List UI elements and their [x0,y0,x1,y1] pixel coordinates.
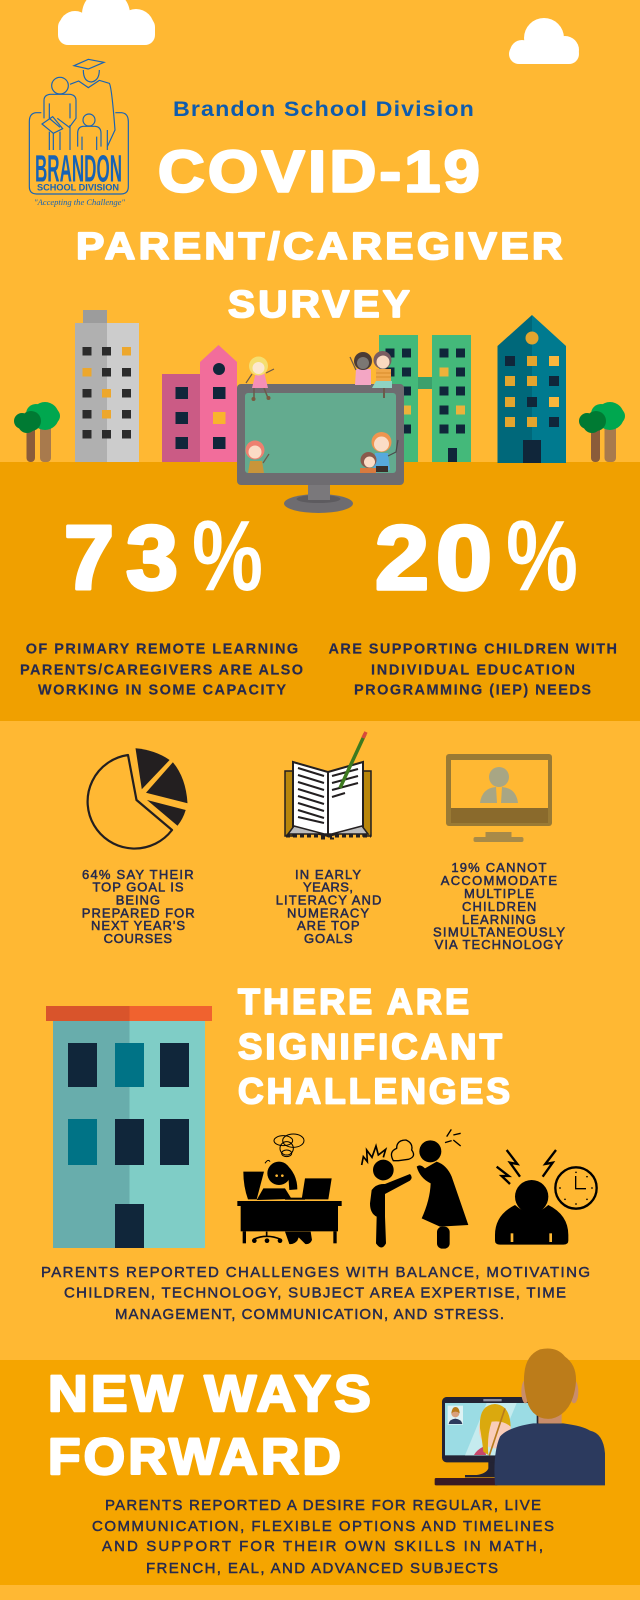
icon: stressed person with clock [495,1150,597,1245]
text: desires reported [92,1497,554,1577]
icon: cloud right [509,18,579,64]
illustration: school building [46,1006,212,1248]
band: statistics background [0,462,640,721]
icon: pie chart [88,748,188,849]
title: Parent/Caregiver: PARENT/CAREGIVER [76,226,566,268]
text: technology limits: LEARNING [462,912,536,927]
text: top goal: PREPARED FOR [82,905,195,920]
text: technology limits: 19% CANNOT [451,860,546,875]
text: top goal: COURSES [104,931,172,946]
text: IEP needs: INDIVIDUAL EDUCATION [371,662,575,678]
text: working parents: PARENTS/CAREGIVERS ARE ALSO [20,662,303,678]
text: challenges reported: MANAGEMENT, COMMUNICATION, AND STRESS. [115,1306,504,1323]
text: early years [276,867,381,946]
icon: cloud left [58,0,155,45]
illustration: grey tower [75,310,139,462]
band: new ways forward background [0,1360,640,1585]
text: challenges reported: PARENTS REPORTED CHALLENGES WITH BALANCE, MOTIVATING [41,1264,590,1281]
text: working parents: WORKING IN SOME CAPACITY [38,682,286,698]
text: top goal: BEING [116,893,160,908]
text: BRANDON [35,148,122,190]
title: Survey: SURVEY [228,284,413,326]
text: top goal: NEXT YEAR'S [91,918,185,933]
text: top goal: 64% SAY THEIR [82,867,194,882]
stat: 73%: 3 [126,508,178,609]
stat: 73%: 7 [64,508,114,609]
illustration: person on video call [435,1349,605,1485]
illustration: teal building [498,315,566,463]
text: early years: LITERACY AND [276,893,381,908]
text: desires reported: FRENCH, EAL, AND ADVANCED SUBJECTS [146,1560,498,1577]
heading: There are significant challenges: CHALLENGES [238,1070,513,1112]
icon: open book and pencil [285,732,371,838]
text: working parents [20,642,303,698]
illustration: green buildings [379,335,471,462]
illustration: left trees [14,402,60,462]
icon: parent and child arguing [362,1129,468,1249]
logo: Brandon School Division: SCHOOL DIVISION [37,182,119,194]
text: desires reported: PARENTS REPORTED A DESIRE FOR REGULAR, LIVE [105,1497,541,1514]
text: early years: GOALS [304,931,353,946]
text: early years: IN EARLY [295,867,361,882]
logo: Brandon School Division: "Accepting the Challenge" [34,198,126,207]
icon: stressed parent at desk [237,1134,342,1244]
text: early years: NUMERACY [287,905,369,920]
text: IEP needs: ARE SUPPORTING CHILDREN WITH [328,642,617,658]
stat: 20%: 0 [436,508,492,609]
illustration: red-haired girl in screen [246,440,269,473]
illustration: two children on monitor [350,351,392,398]
text: technology limits: MULTIPLE [464,886,534,901]
illustration: computer monitor [237,384,404,513]
text: technology limits [433,860,565,952]
text: IEP needs [328,642,617,698]
text: technology limits: SIMULTANEOUSLY [433,925,565,940]
text: challenges reported: CHILDREN, TECHNOLOGY, SUBJECT AREA EXPERTISE, TIME [64,1284,566,1302]
text: technology limits: VIA TECHNOLOGY [435,937,563,952]
text: technology limits: ACCOMMODATE [441,873,557,888]
logo: Brandon School Division [29,59,128,207]
subtitle: Brandon School Division: Brandon School Division [173,98,475,121]
stat: 20%: 2 [375,508,429,609]
text: top goal: TOP GOAL IS [92,880,184,895]
heading: New ways forward: FORWARD [48,1428,344,1485]
heading: There are significant challenges [238,981,513,1112]
illustration: pink building [162,345,237,462]
text: desires reported: AND SUPPORT FOR THEIR OWN SKILLS IN MATH, [102,1538,543,1555]
text: early years: ARE TOP [297,918,360,933]
stat: 73%: % [192,500,263,612]
icon: desktop monitor with person [446,754,552,842]
text: technology limits: CHILDREN [462,899,536,914]
stat: 20% [375,500,578,612]
text: desires reported: COMMUNICATION, FLEXIBLE OPTIONS AND TIMELINES [92,1518,554,1535]
heading: There are significant challenges: THERE ARE [238,981,472,1022]
heading: New ways forward: NEW WAYS [48,1365,374,1422]
text: IEP needs: PROGRAMMING (IEP) NEEDS [354,682,591,698]
heading: There are significant challenges: SIGNIFICANT [238,1026,505,1067]
text: challenges reported [41,1264,590,1323]
illustration: girl sitting on monitor [246,356,274,401]
heading: New ways forward [48,1365,374,1485]
title: COVID-19: COVID-19 [158,140,483,204]
text: early years: YEARS, [303,880,353,895]
illustration: two children in screen [360,432,398,473]
illustration: right trees [579,402,625,462]
stat: 73% [64,500,263,612]
text: working parents: OF PRIMARY REMOTE LEARNING [26,642,298,658]
stat: 20%: % [506,500,578,612]
text: top goal [82,867,195,946]
